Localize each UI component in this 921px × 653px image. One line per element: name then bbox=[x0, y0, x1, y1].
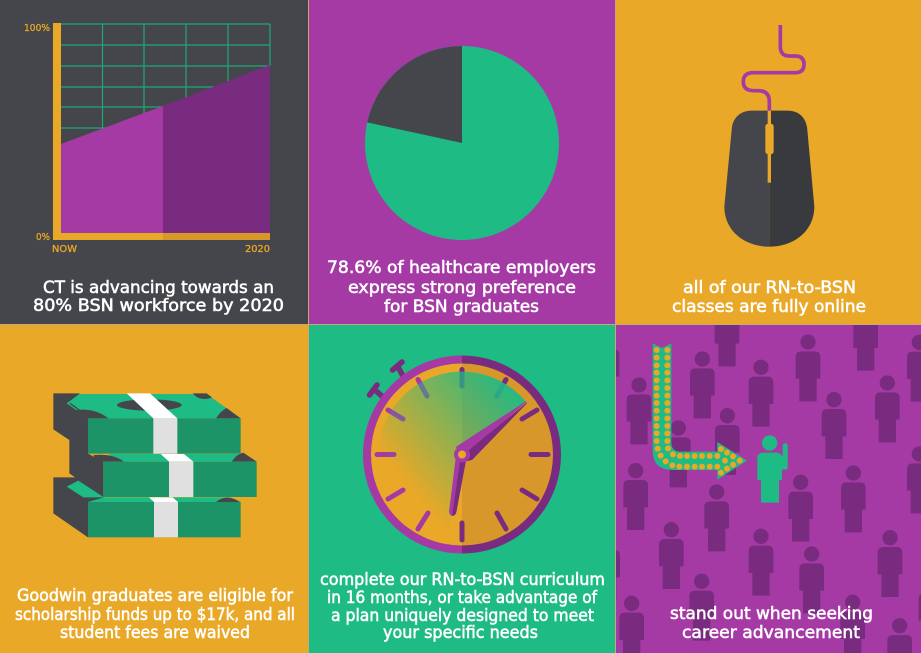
panel: flexible curriculum bbox=[309, 325, 615, 653]
caption: online bbox=[672, 278, 866, 316]
axis labels bbox=[24, 23, 270, 255]
line chart grid bbox=[61, 24, 270, 130]
caption: employers: express strong preference bbox=[348, 278, 576, 297]
axis labels: 100% bbox=[24, 23, 50, 34]
caption: workforce: 80% BSN workforce by 2020 bbox=[33, 296, 284, 315]
panel: employer preference bbox=[309, 0, 615, 324]
hour ticks bbox=[377, 370, 548, 540]
caption: scholarship: Goodwin graduates are eligible for bbox=[17, 586, 293, 605]
icon: computer mouse bbox=[724, 25, 814, 247]
dark sides bbox=[53, 477, 104, 537]
caption: curriculum: a plan uniquely designed to meet bbox=[331, 606, 594, 625]
icon: stopwatch bbox=[363, 356, 561, 554]
caption: career: stand out when seeking bbox=[670, 604, 873, 623]
caption: curriculum: complete our RN-to-BSN curriculum bbox=[320, 570, 605, 589]
top stack bbox=[67, 394, 241, 418]
chart axes bbox=[53, 23, 270, 240]
axis labels: NOW bbox=[52, 244, 78, 255]
stopwatch buttons bbox=[370, 362, 403, 397]
caption: workforce: CT is advancing towards an bbox=[43, 278, 274, 297]
caption: scholarship: student fees are waived bbox=[60, 623, 250, 642]
crowd of people bbox=[616, 325, 921, 653]
arrow: marquee arrow bbox=[653, 343, 747, 480]
panel: online classes bbox=[616, 0, 921, 324]
caption: scholarship: scholarship funds up to $17k, and all bbox=[15, 605, 295, 624]
elapsed time sweep bbox=[379, 372, 526, 536]
panel: scholarship funds bbox=[0, 325, 308, 653]
caption: workforce bbox=[33, 278, 284, 315]
caption: career: career advancement bbox=[682, 623, 861, 642]
panel: workforce chart bbox=[0, 0, 308, 324]
caption: employers: 78.6% of healthcare employers bbox=[327, 258, 596, 277]
caption: employers bbox=[327, 258, 596, 316]
icon: standout person bbox=[757, 435, 788, 503]
caption: curriculum: in 16 months, or take advantage of bbox=[327, 588, 598, 607]
caption: scholarship bbox=[15, 586, 295, 642]
caption: career bbox=[670, 604, 873, 642]
caption: online: all of our RN-to-BSN bbox=[683, 278, 856, 297]
area: projected growth bbox=[61, 65, 270, 233]
clock hands bbox=[450, 402, 527, 516]
stopwatch ring and face bbox=[363, 356, 462, 554]
caption: curriculum: your specific needs bbox=[383, 623, 538, 642]
caption: employers: for BSN graduates bbox=[384, 297, 539, 316]
bottom stack bbox=[67, 481, 104, 497]
axis labels: 2020 bbox=[245, 244, 270, 255]
pie chart bbox=[365, 46, 559, 240]
caption: online: classes are fully online bbox=[672, 297, 866, 316]
axis labels: 0% bbox=[36, 232, 50, 243]
panel: career advancement bbox=[616, 325, 921, 653]
middle stack bbox=[103, 454, 257, 462]
caption: curriculum bbox=[320, 570, 605, 642]
icon: stacks of money bbox=[53, 393, 257, 537]
